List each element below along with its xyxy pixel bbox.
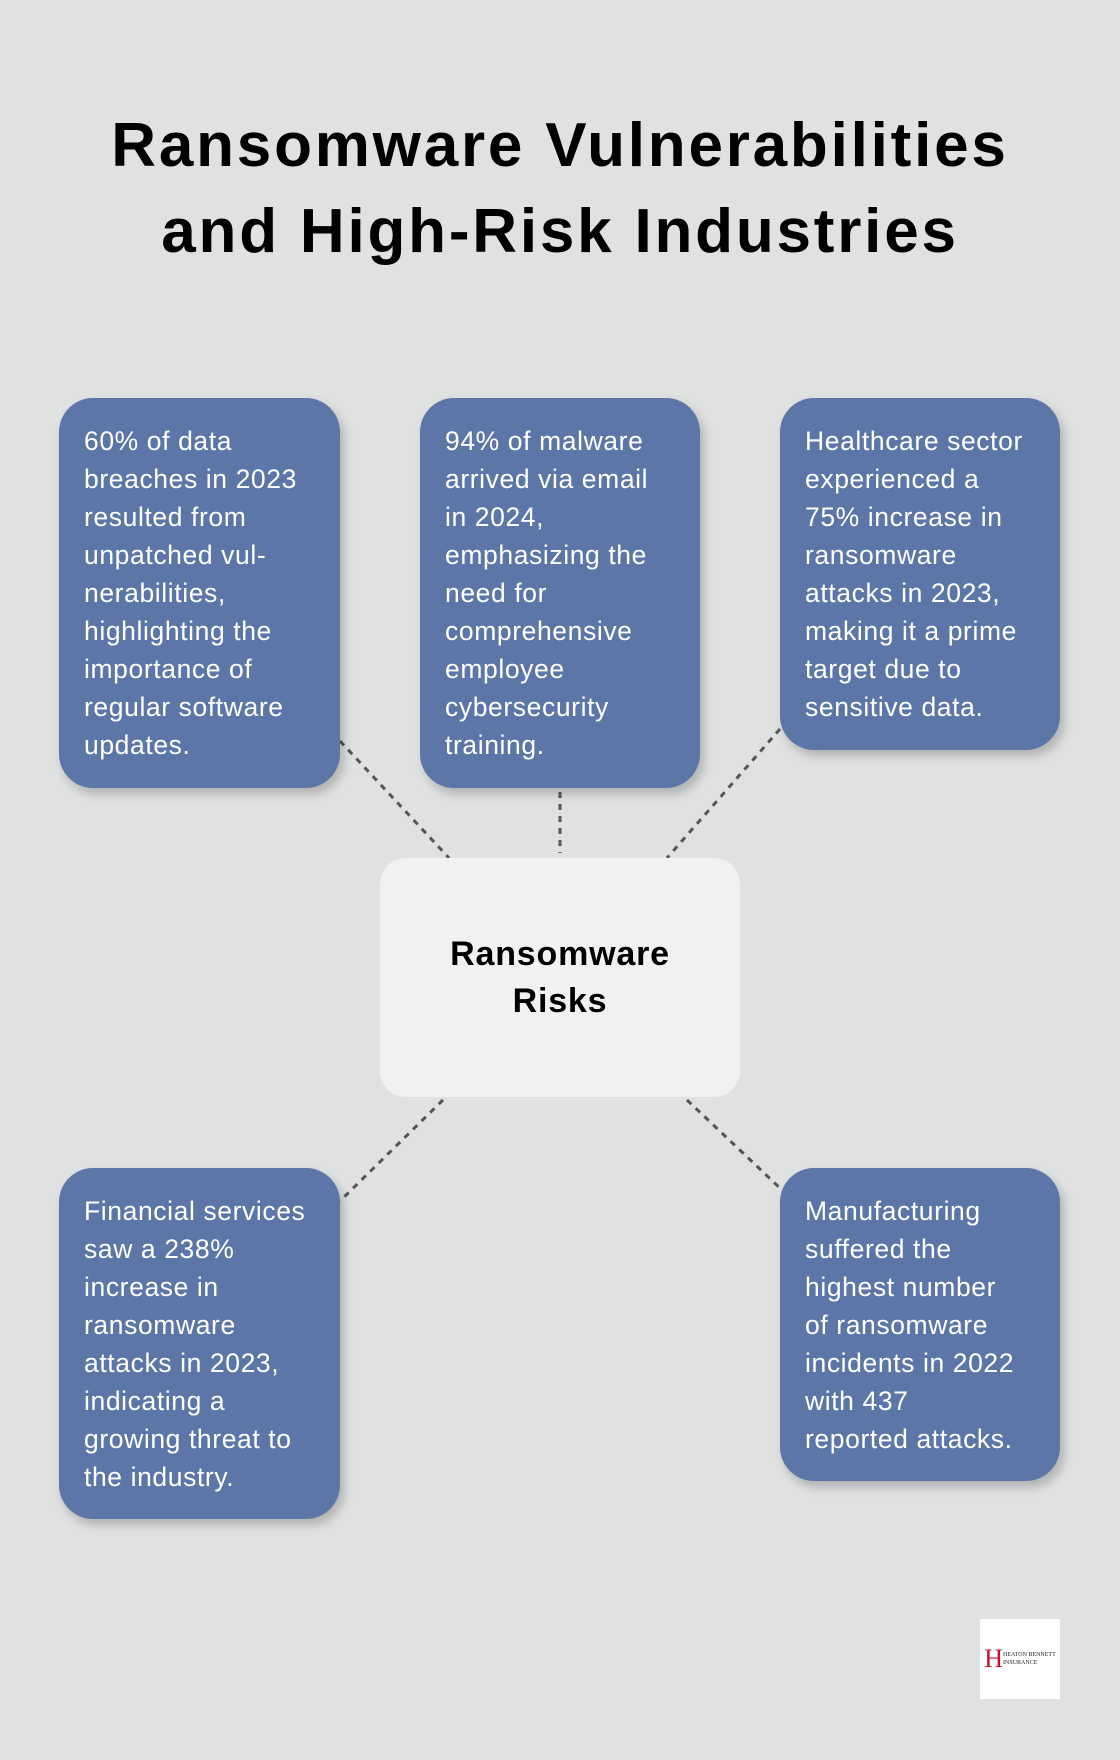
panel: email malware: emphasizing the	[445, 540, 647, 570]
panel: manufacturing: suffered the	[805, 1234, 952, 1264]
panel: financial services: growing threat to	[84, 1424, 292, 1454]
panel: unpatched vulnerabilities: highlighting the	[84, 616, 272, 646]
panel: email malware: cybersecurity	[445, 692, 609, 722]
panel: unpatched vulnerabilities: breaches in 2023	[84, 464, 297, 494]
panel: unpatched vulnerabilities: importance of	[84, 654, 252, 684]
panel: healthcare: target due to	[805, 654, 962, 684]
panel: email malware: training.	[445, 730, 545, 760]
panel: manufacturing: reported attacks.	[805, 1424, 1013, 1454]
panel: manufacturing: incidents in 2022	[805, 1348, 1014, 1378]
panel: healthcare	[780, 398, 1060, 750]
center node	[380, 858, 740, 1097]
panel: email malware: comprehensive	[445, 616, 633, 646]
panel: financial services: Financial services	[84, 1196, 305, 1226]
logo: INSURANCE	[1003, 1660, 1037, 1666]
panel: unpatched vulnerabilities	[59, 398, 340, 788]
panel: financial services: attacks in 2023,	[84, 1348, 279, 1378]
panel: email malware: in 2024,	[445, 502, 544, 532]
panel: financial services: increase in	[84, 1272, 219, 1302]
panel: unpatched vulnerabilities: nerabilities,	[84, 578, 226, 608]
panel: manufacturing: highest number	[805, 1272, 996, 1302]
panel: financial services: saw a 238%	[84, 1234, 234, 1264]
panel: financial services	[59, 1168, 340, 1519]
panel: unpatched vulnerabilities: updates.	[84, 730, 190, 760]
panel: financial services: indicating a	[84, 1386, 225, 1416]
panel: healthcare: ransomware	[805, 540, 957, 570]
center node: Risks	[513, 982, 607, 1020]
panel: manufacturing: with 437	[805, 1386, 909, 1416]
logo: H	[984, 1644, 1003, 1673]
panel: unpatched vulnerabilities: regular software	[84, 692, 284, 722]
panel: unpatched vulnerabilities: unpatched vul-	[84, 540, 266, 570]
panel: unpatched vulnerabilities: resulted from	[84, 502, 246, 532]
panel: manufacturing: of ransomware	[805, 1310, 988, 1340]
panel: email malware: arrived via email	[445, 464, 648, 494]
panel: manufacturing	[780, 1168, 1060, 1481]
panel: manufacturing: Manufacturing	[805, 1196, 981, 1226]
panel: email malware: need for	[445, 578, 547, 608]
panel: healthcare: Healthcare sector	[805, 426, 1023, 456]
panel: healthcare: attacks in 2023,	[805, 578, 1000, 608]
panel: email malware: 94% of malware	[445, 426, 643, 456]
title	[111, 111, 1009, 266]
logo	[980, 1619, 1060, 1699]
panel: email malware	[420, 398, 700, 788]
title: Ransomware Vulnerabilities	[111, 111, 1009, 180]
panel: financial services: the industry.	[84, 1462, 234, 1492]
panel: email malware: employee	[445, 654, 565, 684]
panel: healthcare: sensitive data.	[805, 692, 983, 722]
panel: healthcare: 75% increase in	[805, 502, 1003, 532]
panel: healthcare: making it a prime	[805, 616, 1017, 646]
panel: healthcare: experienced a	[805, 464, 979, 494]
title: and High-Risk Industries	[161, 197, 959, 266]
logo: HEATON BENNETT	[1003, 1652, 1056, 1658]
panel: unpatched vulnerabilities: 60% of data	[84, 426, 232, 456]
center node: Ransomware	[450, 934, 670, 972]
panel: financial services: ransomware	[84, 1310, 236, 1340]
